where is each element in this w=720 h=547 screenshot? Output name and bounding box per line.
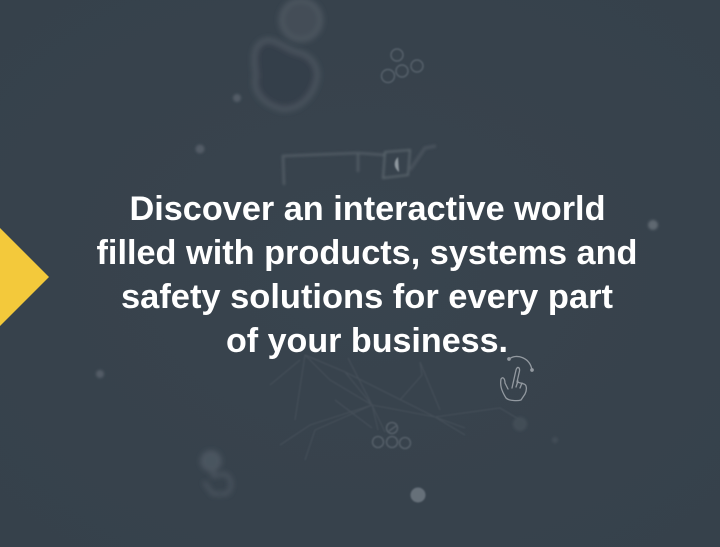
yellow arrow	[0, 228, 49, 326]
background icon: blurred large ring	[254, 40, 317, 109]
background icon: blurred touch gesture bottom left	[202, 452, 231, 494]
background icon: framed device with connector line	[283, 146, 436, 185]
heading line 1: Discover an interactive world	[130, 190, 606, 228]
background dots	[96, 94, 658, 443]
background icon: blurred circle ring top	[281, 0, 321, 40]
heading text	[96, 190, 638, 360]
background icon: cluster of small rings top	[382, 49, 423, 82]
background: network lines	[270, 355, 520, 460]
heading line 3: safety solutions for every part	[121, 278, 613, 316]
icon: hand swipe gesture	[501, 356, 533, 401]
heading line 2: filled with products, systems and	[96, 234, 638, 272]
background icon: device highlight	[395, 157, 399, 172]
heading line 4: of your business.	[226, 322, 508, 360]
background icon: rings and arrow cluster bottom	[372, 422, 410, 448]
background dot: bottom circle	[410, 488, 426, 502]
